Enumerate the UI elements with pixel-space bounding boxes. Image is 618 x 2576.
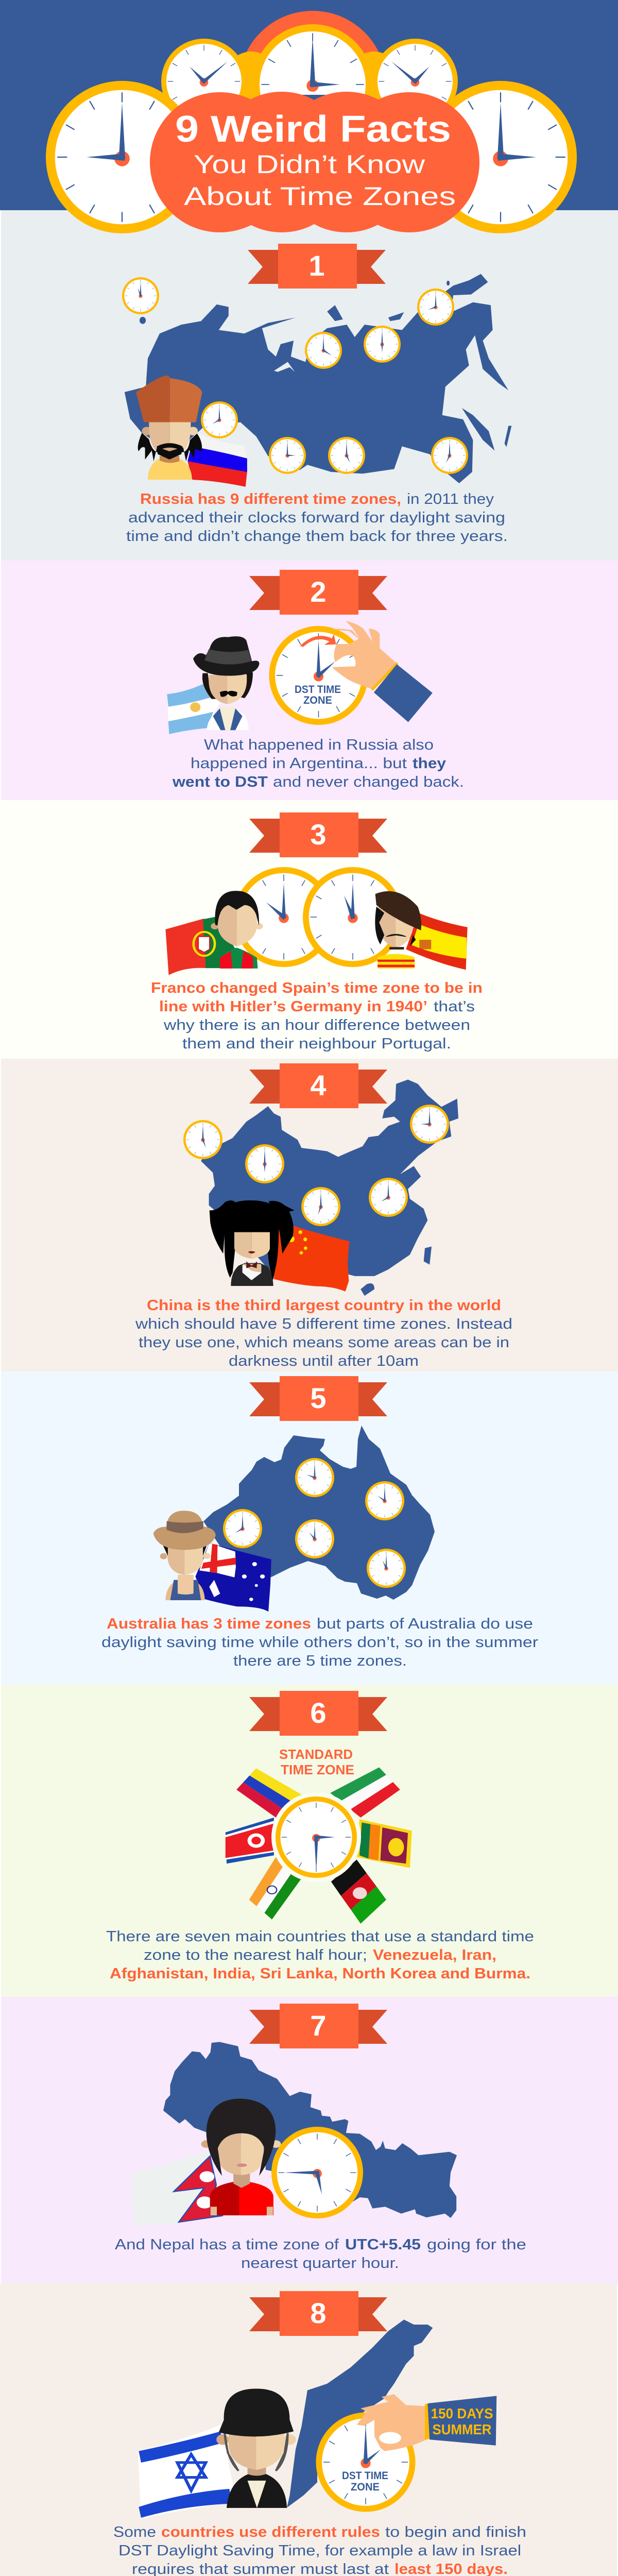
text: fact 3: line with Hitler’s Germany in 1940’ (159, 998, 427, 1015)
text: fact 3: why there is an hour difference between (163, 1017, 470, 1033)
text: fact 4: they use one, which means some areas can be in (139, 1334, 509, 1351)
ribbon: fact 5 (249, 1376, 387, 1421)
character: Nepali woman with flag (131, 2098, 281, 2225)
ribbon: fact 1 (248, 244, 386, 289)
text: fact 5: daylight saving time while others don’t, so in the summer (101, 1634, 538, 1651)
text: fact 7 (115, 2236, 526, 2272)
ribbon: fact 8 (249, 2291, 387, 2336)
icon: top centre clock (252, 24, 373, 145)
character: Australian man with flag (153, 1511, 271, 1612)
title: About Time Zones (184, 182, 456, 211)
text: fact 8: to begin and finish (385, 2524, 526, 2540)
character: Argentine man with flag (167, 636, 259, 734)
icon: large right clock (424, 81, 577, 233)
map: Israel (287, 2319, 433, 2507)
label: standard time zone: STANDARD (279, 1747, 353, 1762)
text: fact 5: there are 5 time zones. (233, 1653, 407, 1669)
text: fact 8 (113, 2524, 526, 2576)
text: fact 2: and never changed back. (273, 774, 464, 790)
label: DST time zone: ZONE (351, 2481, 380, 2493)
label: standard time zone: TIME ZONE (281, 1762, 354, 1777)
hand (357, 2394, 496, 2451)
label: standard time zone (279, 1747, 354, 1777)
icon: DST clock with hand and 150 days sleeve (316, 2394, 496, 2512)
ribbon: fact 8: 8 (310, 2297, 327, 2329)
label: DST time zone (342, 2470, 388, 2493)
character: Russian man with flag (136, 376, 247, 487)
title: 9 Weird Facts (175, 109, 451, 150)
text: fact 3: them and their neighbour Portugal. (182, 1036, 451, 1052)
character: Spanish man with flag (375, 891, 468, 970)
flag: Venezuela (236, 1768, 301, 1818)
icon: top left clock (161, 39, 247, 124)
text: fact 1: time and didn’t change them back for three years. (126, 528, 508, 545)
hand adjusting clock (301, 621, 433, 722)
clocks on Australia map (223, 1458, 406, 1588)
map: China (201, 1079, 458, 1296)
character: Chinese girl with flag (210, 1200, 349, 1292)
text: fact 8: DST Daylight Saving Time, for example a law in Israel (118, 2543, 521, 2559)
ribbon: fact 2: 2 (310, 575, 327, 608)
clocks on China map (183, 1105, 449, 1226)
ribbon: fact 3: 3 (310, 818, 327, 851)
flag: Sri Lanka (357, 1819, 412, 1868)
text: fact 4: China is the third largest country in the world (147, 1297, 501, 1314)
text: fact 5: but parts of Australia do use (317, 1616, 533, 1632)
text: fact 6: Afghanistan, India, Sri Lanka, North Korea and Burma. (110, 1965, 530, 1982)
text: fact 5 (101, 1616, 538, 1669)
text: fact 4: darkness until after 10am (229, 1353, 419, 1369)
character: Portuguese man with flag (165, 891, 263, 975)
icon: top right clock (372, 39, 458, 124)
text: fact 7: nearest quarter hour. (241, 2255, 399, 2272)
text: fact 2: went to DST (172, 774, 268, 790)
illustration: DST clock and hand (269, 621, 433, 725)
icon: Nepal clock (271, 2127, 363, 2218)
map: Russia (125, 274, 511, 483)
text: fact 7: UTC+5.45 (345, 2236, 421, 2253)
text: fact 6: There are seven main countries that use a standard time (106, 1928, 534, 1945)
icons: two clocks, Portugal and Spain (234, 867, 403, 967)
text: fact 5: Australia has 3 time zones (107, 1616, 311, 1632)
ribbon: fact 6 (249, 1691, 387, 1736)
label: DST time zone: ZONE (303, 694, 332, 706)
text: fact 4: which should have 5 different time zones. Instead (135, 1316, 512, 1332)
text: fact 1: in 2011 they (407, 491, 494, 507)
text: fact 2 (172, 737, 464, 790)
ribbon: fact 7: 7 (310, 2009, 327, 2042)
text: fact 7: going for the (427, 2236, 526, 2253)
ribbon: fact 5: 5 (310, 1382, 327, 1414)
label: DST time zone (295, 684, 341, 706)
map: Nepal (163, 2042, 457, 2218)
ribbon: fact 4: 4 (310, 1069, 327, 1101)
title (175, 109, 456, 211)
ribbon: fact 3 (249, 812, 387, 857)
label: DST time zone: DST TIME (295, 684, 341, 696)
text: fact 7: And Nepal has a time zone of (115, 2236, 339, 2253)
flag: North Korea (226, 1818, 274, 1863)
ribbon: fact 2 (249, 570, 387, 615)
text: fact 3: that’s (434, 998, 475, 1015)
flags around standard clock (226, 1767, 412, 1924)
text: fact 8: countries use different rules (161, 2524, 380, 2540)
label: DST time zone: DST TIME (342, 2470, 388, 2482)
text: fact 3: Franco changed Spain’s time zone to be in (151, 980, 483, 996)
text: fact 6: Venezuela, Iran, (373, 1947, 496, 1963)
header illustration: clocks behind the title (46, 11, 577, 233)
flag: Iran (330, 1767, 400, 1818)
text: fact 2: What happened in Russia also (204, 737, 434, 753)
icon: DST clock (269, 626, 368, 725)
flag: India (249, 1857, 301, 1920)
title: You Didn’t Know (194, 150, 425, 179)
text: fact 1 (126, 491, 508, 545)
text: fact 6: zone to the nearest half hour; (144, 1947, 367, 1963)
clocks on Russia map (122, 277, 468, 474)
map: Australia (203, 1426, 435, 1600)
text: fact 8: Some (113, 2524, 156, 2540)
icon: large left clock (46, 81, 198, 233)
ribbon: fact 7 (249, 2004, 387, 2048)
text: fact 1: advanced their clocks forward for daylight saving (128, 510, 505, 526)
text: fact 1: Russia has 9 different time zones, (140, 491, 401, 507)
text: fact 2: happened in Argentina... but (191, 755, 407, 772)
character: Israeli soldier with flag (138, 2388, 296, 2518)
text: fact 4 (135, 1297, 512, 1369)
label: 150 days summer: 150 DAYS (431, 2405, 493, 2421)
label: 150 days summer: SUMMER (433, 2421, 491, 2437)
title cloud (150, 92, 479, 232)
ribbon: fact 4 (249, 1063, 387, 1108)
icon: standard time zone clock (271, 1792, 361, 1882)
text: fact 2: they (413, 755, 446, 772)
text: fact 6 (106, 1928, 534, 1982)
ribbon: fact 6: 6 (310, 1697, 327, 1729)
flag: Afghanistan (331, 1860, 386, 1924)
text: fact 3 (151, 980, 483, 1052)
ribbon: fact 1: 1 (308, 249, 325, 282)
label: 150 days summer (431, 2405, 493, 2437)
